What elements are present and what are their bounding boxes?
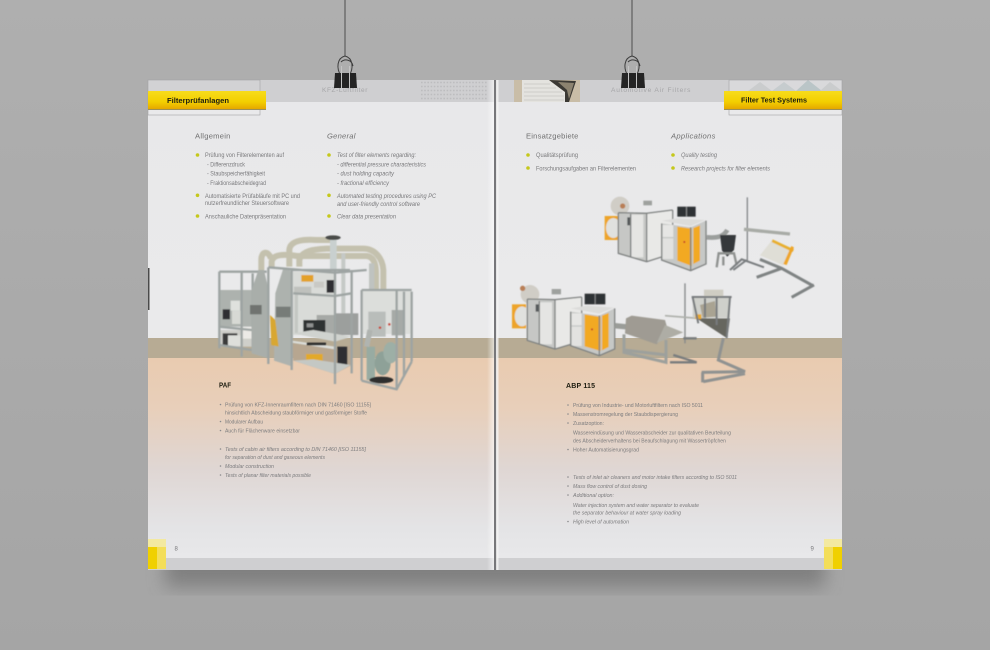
- list: PAF English: Tests of planar filter materials possible: [225, 473, 311, 479]
- text block: Allgemein: [195, 132, 300, 220]
- dust feeder: [720, 235, 736, 257]
- text block: General: General: [327, 132, 356, 140]
- mobile base: [702, 338, 745, 382]
- connector: [615, 326, 628, 327]
- list: PAF German: Prüfung von KFZ-Innenraumfiltern nach DIN 71460 [ISO 11155]: [225, 402, 371, 408]
- silver cabinet: [527, 297, 582, 349]
- list: ABP 115 English: the separator behaviour at water spray loading: [573, 510, 682, 516]
- text block: General: Automated testing procedures using PC: [336, 193, 436, 200]
- running title: Automotive Air Filters: Automotive Air Filters: [611, 87, 691, 94]
- header thumbnail: filter element: [514, 80, 580, 102]
- heading tab: Filterprüfanlagen: [148, 80, 266, 115]
- ducting: [261, 240, 383, 313]
- text block: Allgemein: Prüfung von Filterelementen auf: [205, 152, 284, 159]
- text block: General: [327, 132, 436, 220]
- list: ABP 115 German: Hoher Automatisierungsgrad: [573, 448, 639, 454]
- controller: [760, 239, 794, 265]
- list: PAF German: hinsichtlich Abscheidung staubförmiger und gasförmiger Stoffe: [225, 410, 367, 416]
- text block: Einsatzgebiete: Forschungsaufgaben an Filterelementen: [536, 165, 636, 172]
- heading tab: Filter Test Systems: Filter Test Systems: [741, 96, 807, 104]
- machine photo: PAF test rig: [219, 235, 412, 389]
- list: ABP 115 German: des Abscheiderverhaltens bei Beaufschlagung mit Wassertröpfchen: [573, 438, 726, 444]
- text block: General: - fractional efficiency: [337, 180, 390, 187]
- text block: Allgemein: - Staubspeicherfähigkeit: [207, 171, 265, 178]
- list: ABP 115 German: Zusatzoption:: [573, 421, 604, 427]
- text block: Applications: Research projects for filter elements: [681, 165, 770, 172]
- text block: General: - differential pressure characteristics: [337, 161, 426, 168]
- text block: Einsatzgebiete: Einsatzgebiete: [526, 132, 579, 140]
- text block: General: and user-friendly control software: [337, 201, 421, 208]
- page number 9: 9: [810, 546, 814, 552]
- list: ABP 115 German: Prüfung von Industrie- und Motorluftfiltern nach ISO 5011: [573, 403, 703, 409]
- yellow roll holder: [512, 304, 526, 328]
- heading tab: Filter Test Systems: [724, 80, 842, 115]
- list: ABP 115 German: Wassereindüsung und Wasserabscheider zur qualitativen Beurteilung: [573, 430, 731, 436]
- orange cabinet: [662, 221, 706, 271]
- right module: [363, 291, 411, 334]
- text block: General: Test of filter elements regarding:: [337, 152, 416, 159]
- list: ABP 115 English: Water injection system and water separator to evaluate: [573, 503, 699, 509]
- panel: right page: [496, 80, 842, 570]
- list: ABP 115 English: Additional option:: [572, 493, 614, 499]
- running title: KFZ-Luftfilter: KFZ-Luftfilter: [322, 87, 368, 94]
- list: ABP 115 German: [567, 403, 731, 454]
- list: PAF English: Tests of cabin air filters according to DIN 71460 [ISO 11155]: [225, 447, 366, 453]
- header decoration: dot pattern: [421, 82, 487, 98]
- text block: Einsatzgebiete: [526, 132, 636, 172]
- list: PAF English: Modular construction: [225, 464, 274, 470]
- list: PAF English: [220, 447, 366, 479]
- list: ABP 115 English: High level of automation: [573, 520, 629, 526]
- text block: Applications: Quality testing: [681, 152, 718, 159]
- orange cabinet: [571, 308, 615, 356]
- brochure drop shadow: [165, 545, 825, 587]
- list: ABP 115 German: Massenstromregelung der Staubdispergierung: [573, 412, 678, 418]
- list: ABP 115 English: [567, 475, 737, 526]
- corner mark: left yellow squares: [148, 539, 166, 569]
- text block: Allgemein: Anschauliche Datenpräsentation: [205, 213, 287, 220]
- main frame: [293, 272, 335, 335]
- list: ABP 115 English: Tests of inlet air cleaners and motor intake filters according to ISO 5011: [573, 475, 737, 481]
- list: PAF German: [220, 402, 371, 434]
- cyclones: [252, 270, 269, 358]
- upper frame: [704, 290, 723, 298]
- monitor: [677, 207, 696, 217]
- spine fold: [494, 80, 496, 570]
- text block: Applications: Applications: [670, 132, 716, 140]
- machine photo: ABP 115 dust test rig with duct and frame: [512, 283, 745, 382]
- machine photo: ABP 115 dust test rig with stand and controller: [605, 197, 814, 297]
- yellow roll holder: [605, 216, 618, 240]
- filter housing: [625, 316, 668, 344]
- list: PAF German: Auch für Flächenware einsetzbar: [225, 428, 300, 434]
- page number 8: 8: [174, 546, 178, 552]
- corner mark: right yellow squares: [824, 539, 842, 569]
- text block: Allgemein: nutzerfreundlicher Steuersoftware: [205, 200, 289, 207]
- list: PAF German: Modularer Aufbau: [225, 420, 263, 426]
- list: PAF English: for separation of dust and gaseous elements: [225, 455, 325, 461]
- text block: Applications: [670, 132, 770, 172]
- list: ABP 115 English: Mass flow control of dust dosing: [573, 484, 648, 490]
- text block: Allgemein: Allgemein: [195, 132, 231, 140]
- monitor: [585, 294, 605, 304]
- heading tab: Filterprüfanlagen: Filterprüfanlagen: [167, 96, 229, 105]
- text block: Allgemein: Automatisierte Prüfabläufe mit PC und: [205, 193, 300, 200]
- stand: [745, 197, 749, 261]
- hose: [707, 230, 727, 238]
- binder clip right: [621, 0, 645, 88]
- left module: [219, 290, 253, 327]
- text block: Allgemein: - Differenzdruck: [207, 161, 246, 168]
- panel: left page: [148, 80, 494, 570]
- text block: Allgemein: - Fraktionsabscheidegrad: [207, 180, 266, 187]
- text block: General: Clear data presentation: [337, 213, 397, 220]
- silver cabinet: [618, 210, 673, 262]
- binder clip left: [334, 0, 357, 88]
- header decoration: triangle pattern: [729, 80, 842, 91]
- text block: Einsatzgebiete: Qualitätsprüfung: [536, 152, 579, 159]
- text block: General: - dust holding capacity: [337, 171, 395, 178]
- heading: ABP 115: ABP 115: [566, 383, 595, 390]
- stand: [683, 283, 687, 343]
- heading: PAF: PAF: [219, 382, 232, 390]
